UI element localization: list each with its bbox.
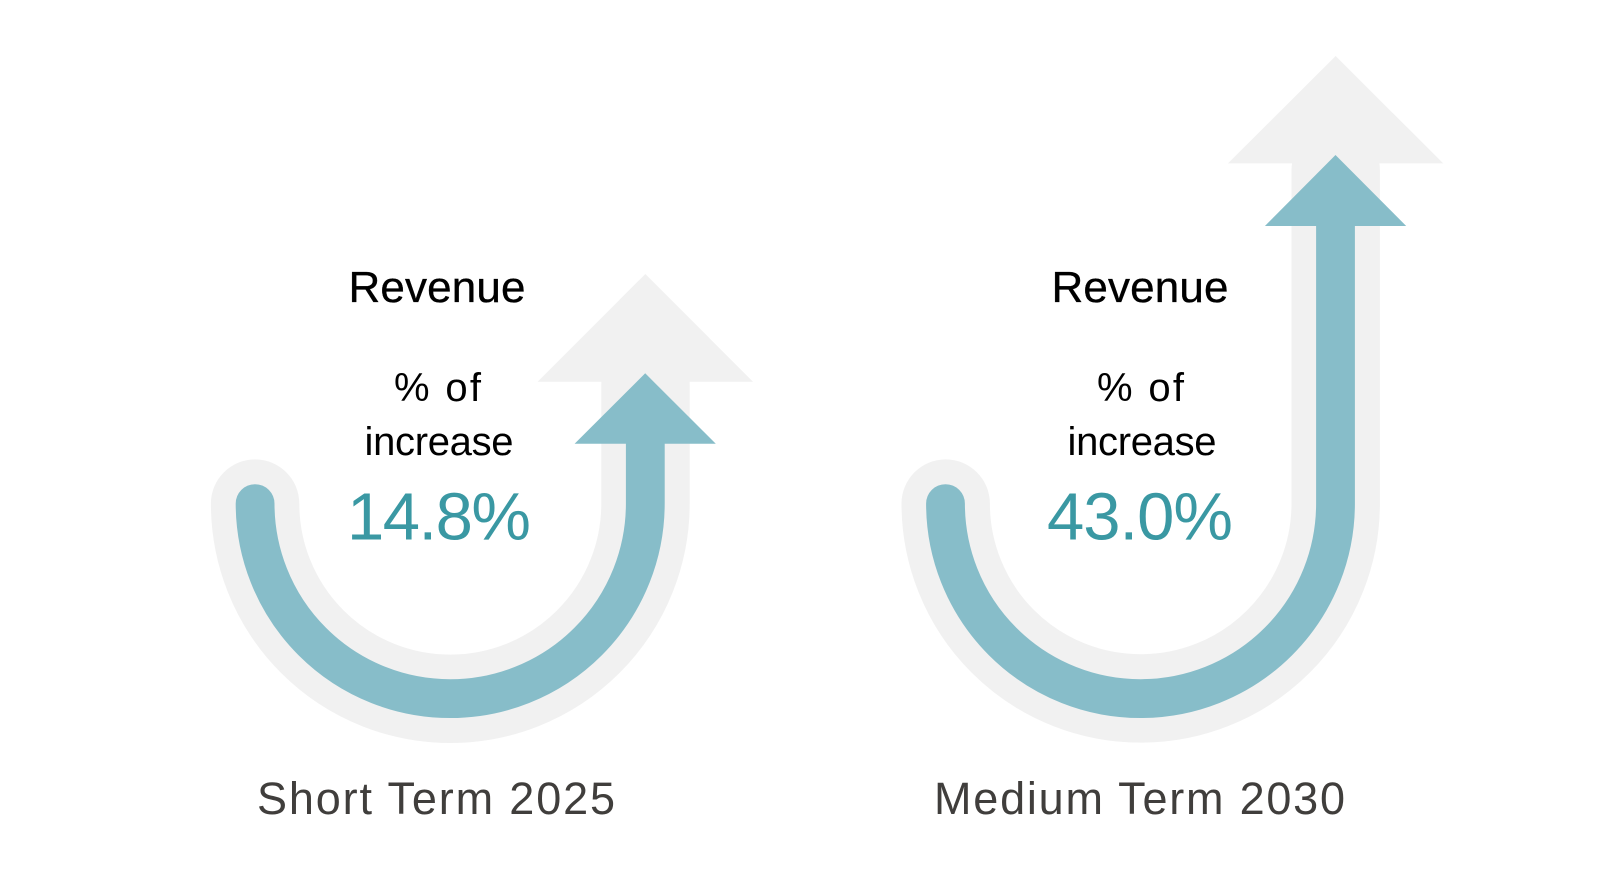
text: percent of increase	[364, 366, 514, 464]
panel: medium term 2030	[934, 56, 1443, 824]
label: short term 2025: Short Term 2025	[257, 773, 615, 824]
arrow: short term foreground	[255, 373, 716, 699]
value: 43.0%: 43.0%	[1047, 480, 1233, 554]
arrow: medium term background	[946, 56, 1443, 698]
text: percent of increase: increase	[364, 420, 514, 464]
text: percent of increase: % of	[1097, 366, 1185, 410]
arrow: short term background	[255, 274, 753, 699]
arrow: medium term foreground	[946, 155, 1406, 699]
label: medium term 2030: Medium Term 2030	[934, 773, 1345, 824]
panel: short term 2025	[255, 263, 753, 824]
heading: revenue: Revenue	[348, 263, 526, 312]
value: 14.8%: 14.8%	[347, 480, 531, 554]
text: percent of increase: increase	[1068, 420, 1216, 464]
heading: revenue: Revenue	[1052, 263, 1228, 312]
text: percent of increase: % of	[394, 366, 482, 410]
text: percent of increase	[1068, 366, 1216, 464]
